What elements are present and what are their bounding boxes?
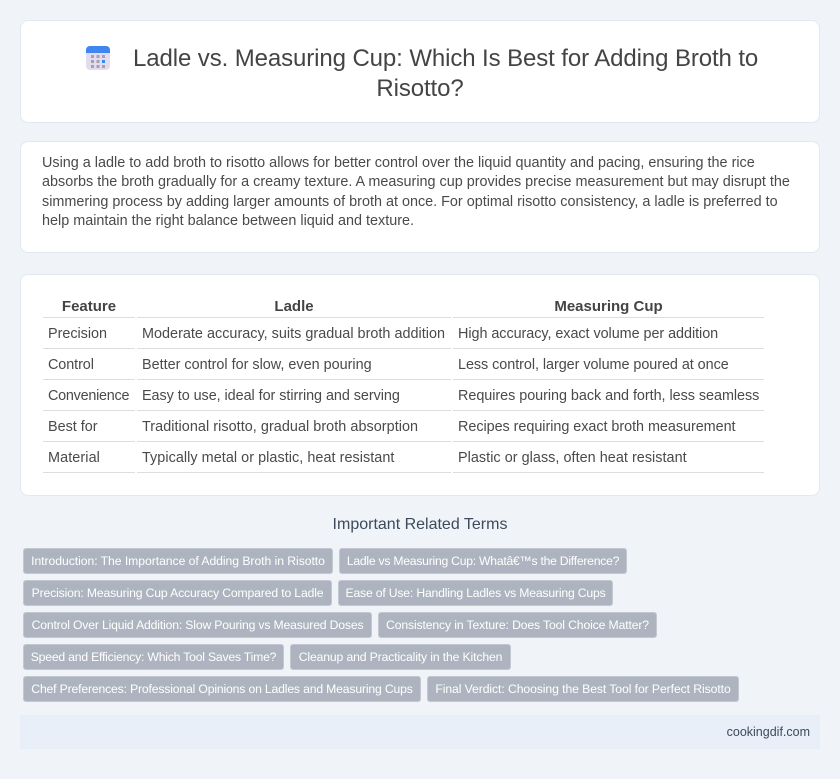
row: convenience — [48, 388, 759, 404]
table contents: Ladle — [274, 298, 314, 315]
table contents: Feature — [62, 298, 116, 315]
table contents: Better control for slow, even pouring — [142, 357, 372, 373]
row: material — [48, 450, 687, 466]
table contents: Easy to use, ideal for stirring and serving — [142, 388, 400, 404]
icon: calendar — [86, 46, 110, 70]
row: precision — [48, 326, 718, 342]
row: best for — [48, 419, 736, 435]
title: Risotto? — [376, 75, 464, 102]
related terms chips: Chef Preferences: Professional Opinions on Ladles and Measuring Cups — [31, 682, 413, 696]
related terms chips: Ladle vs Measuring Cup: Whatâ€™s the Difference? — [347, 554, 619, 568]
table contents: Measuring Cup — [554, 298, 663, 315]
related terms chips: Consistency in Texture: Does Tool Choice Matter? — [386, 618, 649, 632]
column headings — [62, 298, 663, 315]
table contents: Material — [48, 450, 100, 466]
comparison table panel — [20, 274, 820, 496]
intro text: Using a ladle to add broth to risotto allows for better control over the liquid quantity and pacing, ensuring the rice — [42, 155, 755, 171]
intro panel — [20, 141, 820, 253]
table contents: Plastic or glass, often heat resistant — [458, 450, 687, 466]
header card — [20, 20, 820, 123]
table contents: Typically metal or plastic, heat resistant — [142, 450, 394, 466]
related terms chips: Precision: Measuring Cup Accuracy Compared to Ladle — [32, 586, 323, 600]
intro text: simmering process by adding larger amounts of broth at once. For optimal risotto consistency, a ladle is preferred to — [42, 194, 778, 210]
intro text: absorbs the broth gradually for a creamy texture. A measuring cup provides precise measurement but may disrupt the — [42, 174, 790, 190]
related terms chips: Control Over Liquid Addition: Slow Pouring vs Measured Doses — [32, 618, 363, 632]
title: Ladle vs. Measuring Cup: Which Is Best for Adding Broth to — [133, 45, 758, 72]
related terms chips: Ease of Use: Handling Ladles vs Measuring Cups — [346, 586, 606, 600]
footer bar — [20, 715, 820, 749]
table contents: Control — [48, 357, 94, 373]
row: control — [48, 357, 729, 373]
table contents: Less control, larger volume poured at once — [458, 357, 729, 373]
related terms chips: Speed and Efficiency: Which Tool Saves Time? — [31, 650, 276, 664]
table contents: Convenience — [48, 388, 129, 404]
table contents: Recipes requiring exact broth measurement — [458, 419, 736, 435]
related terms chips — [23, 548, 739, 702]
related terms chips: Cleanup and Practicality in the Kitchen — [299, 650, 502, 664]
intro text: help maintain the right balance between liquid and texture. — [42, 213, 414, 229]
related terms chips: Introduction: The Importance of Adding Broth in Risotto — [31, 554, 325, 568]
table contents: Requires pouring back and forth, less seamless — [458, 388, 759, 404]
table contents: High accuracy, exact volume per addition — [458, 326, 718, 342]
footer source: cookingdif.com — [727, 725, 810, 739]
intro text — [42, 155, 790, 229]
table contents: Precision — [48, 326, 107, 342]
table contents: Moderate accuracy, suits gradual broth addition — [142, 326, 445, 342]
table contents: Best for — [48, 419, 98, 435]
related terms chips: Final Verdict: Choosing the Best Tool for Perfect Risotto — [435, 682, 731, 696]
table contents: Traditional risotto, gradual broth absorption — [142, 419, 418, 435]
related terms heading: Important Related Terms — [333, 516, 507, 533]
title — [133, 45, 758, 102]
